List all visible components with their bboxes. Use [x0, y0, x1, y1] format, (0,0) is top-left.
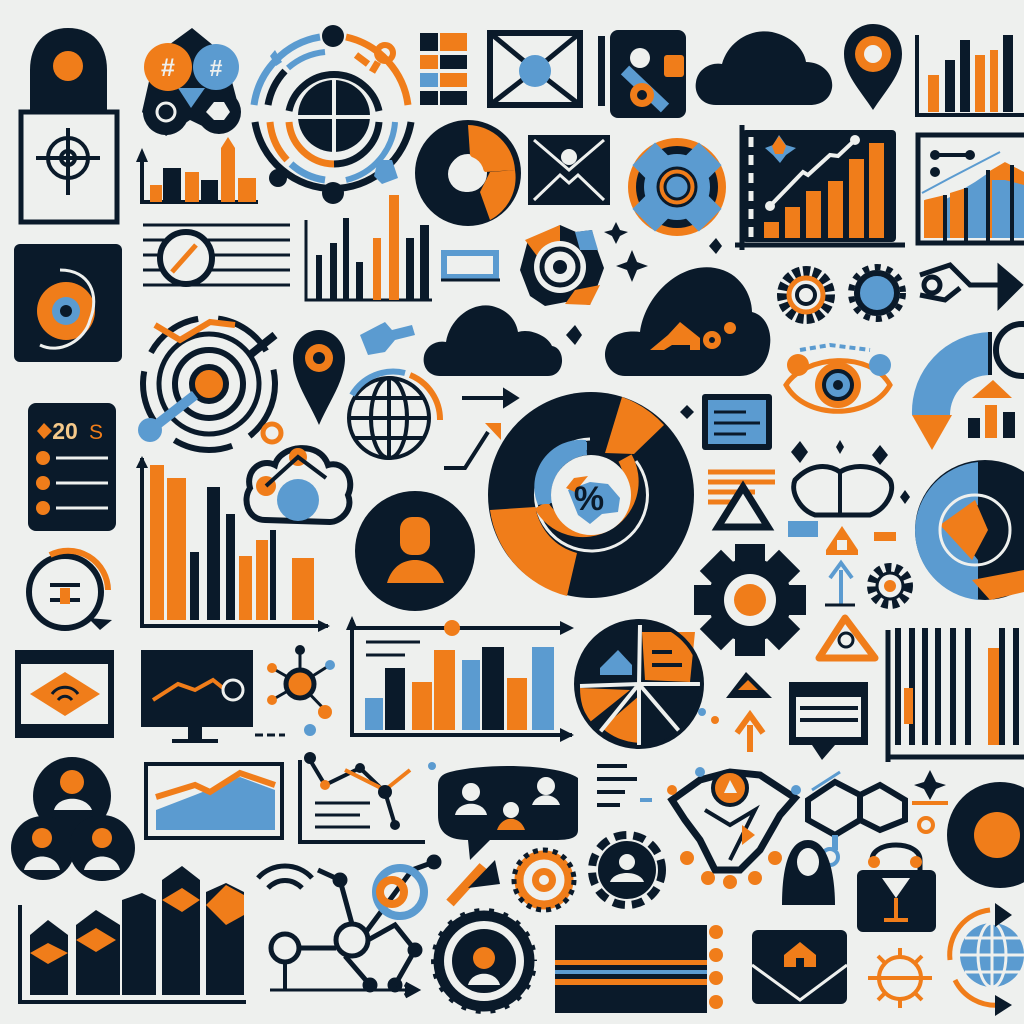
icon: orange gear	[514, 850, 574, 910]
icon: monitor wifi	[15, 650, 114, 738]
icon: envelope house	[752, 930, 847, 1004]
icon: location pin small	[293, 330, 345, 425]
chart: main donut: %	[574, 480, 604, 518]
icon: cloud with nodes	[605, 267, 770, 376]
icon: team circles	[11, 757, 135, 881]
icon: triangle with stripes	[708, 472, 775, 527]
icon: network burst	[255, 645, 335, 736]
arrow: orange up	[450, 860, 500, 903]
chart: main donut	[488, 392, 694, 598]
chart: barcode bars	[888, 628, 1024, 762]
chart: area panel right	[918, 135, 1024, 243]
icon: target with person	[431, 908, 537, 1014]
icon: target with rays	[138, 318, 281, 450]
icon: speech panel	[789, 682, 868, 760]
icon: hash badges: #	[210, 55, 223, 81]
icon: small orange house and arrow	[788, 521, 896, 605]
icon: eye	[786, 345, 891, 411]
icon: small gear	[872, 568, 908, 604]
panel: striped banner	[555, 925, 723, 1013]
icon: blue message tag	[441, 250, 500, 280]
chart: house bars	[20, 866, 246, 1002]
icon: hash badges	[142, 28, 241, 136]
icon: person circle	[355, 491, 475, 611]
arrow: stepped trend	[444, 391, 516, 468]
icon: star and marker	[912, 770, 948, 832]
icon: black square eye	[14, 244, 122, 362]
card: list panel with year: 20	[52, 418, 78, 444]
icon: briefcase glass	[857, 845, 936, 932]
chart: donut orange	[432, 125, 516, 220]
icon: sparkle stars	[566, 222, 722, 345]
icon: orange lock	[819, 618, 875, 658]
chart: right semi arc	[912, 324, 1024, 450]
icon: sparkle cluster	[791, 440, 910, 504]
chart: segmented pie	[576, 621, 702, 747]
icon: gear blue orange	[628, 138, 726, 236]
chart: large orange bars	[136, 456, 330, 632]
icon: phone with profile	[598, 30, 686, 118]
card: list panel with year: S	[89, 421, 103, 444]
icon: big circle right	[947, 782, 1024, 888]
icon: wifi and nodes	[258, 857, 439, 996]
icon: globe	[349, 372, 440, 458]
icon: globe with arrows	[950, 903, 1024, 1016]
icon: envelope	[490, 33, 580, 105]
icon: chat with people	[438, 766, 578, 860]
chart: blue orange bars	[346, 616, 574, 742]
icon: cloud network	[246, 448, 350, 522]
chart: growth panel	[735, 125, 905, 250]
icon: hash badges: #	[161, 54, 175, 82]
icon: speed lines	[597, 766, 652, 805]
text panel: gauge lines	[143, 225, 290, 285]
icon: mail with person	[528, 135, 610, 205]
icon: hexagon molecule	[808, 772, 905, 865]
icon: blue text panel	[680, 394, 772, 450]
chart: right donut	[915, 460, 1024, 600]
icon: blue blobs	[360, 322, 415, 355]
icon: target ring	[254, 25, 411, 204]
icon: gear with ring	[520, 225, 604, 306]
icon: woman silhouette	[782, 840, 835, 905]
chart: top right bars	[917, 35, 1024, 115]
icon: mountain and arrow	[698, 672, 772, 752]
icon: network arrow	[920, 265, 1020, 305]
icon: cloud	[696, 31, 832, 105]
icon: stacked colour blocks	[420, 33, 467, 105]
icon: gears row	[782, 267, 903, 319]
icon: monitor line chart	[141, 650, 253, 743]
icon: open book outline	[794, 467, 892, 515]
icon: network shield	[667, 767, 801, 889]
icon: location pin	[844, 24, 902, 110]
chart: area panel	[146, 764, 282, 838]
card: list panel with year	[28, 403, 116, 531]
icon: profile badge with target	[21, 28, 117, 222]
icon: cloud small	[424, 305, 562, 376]
icon: magnifier list	[29, 551, 112, 630]
chart: small bars	[136, 137, 258, 202]
chart: mid bars	[306, 195, 432, 300]
icon: gear person	[592, 835, 662, 905]
icon: orange target cross	[868, 948, 932, 1008]
chart: network line graph	[300, 752, 436, 842]
icon: large gear	[694, 544, 806, 656]
